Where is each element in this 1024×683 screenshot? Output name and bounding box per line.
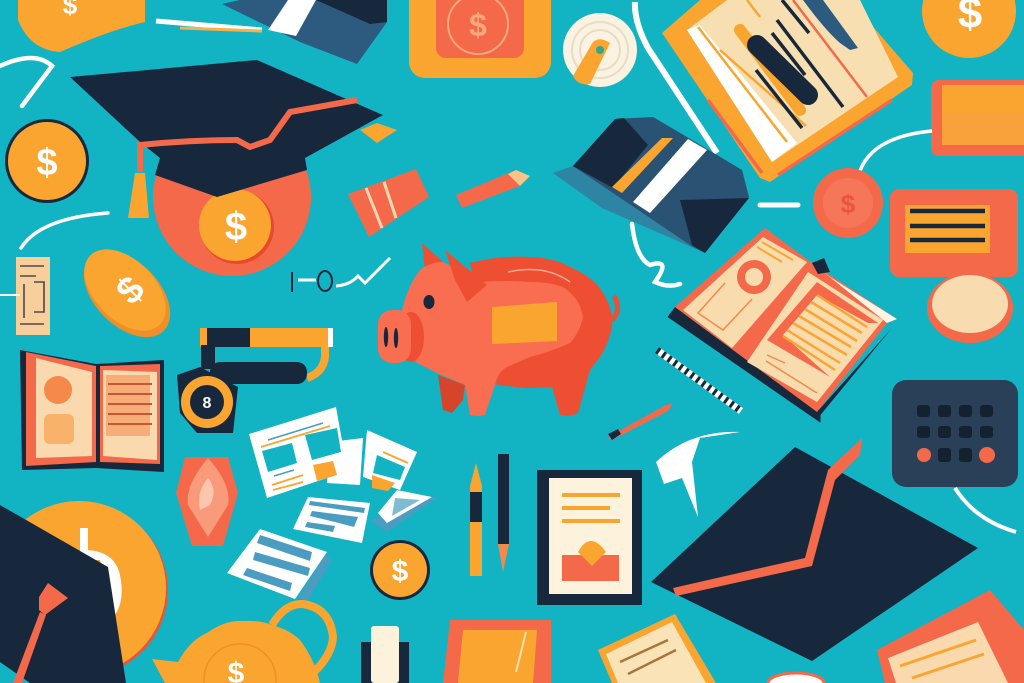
- icon: red pencil: [608, 403, 673, 440]
- decorative white arcs: [0, 58, 798, 286]
- icon: coral coin: $: [841, 189, 856, 219]
- decorative scribble with glyphs: [292, 258, 390, 292]
- icon: bottom bottle: [361, 626, 409, 683]
- icon: coral credit card: [890, 189, 1018, 277]
- icon: large graduation cap with coin: [70, 60, 397, 276]
- icon: large black graduation cap: [651, 438, 978, 661]
- icon: gold coin left: $: [36, 142, 58, 184]
- icon: small crayon: [456, 170, 530, 208]
- icon: striped eraser: [348, 169, 429, 237]
- icon: gold coin left: [5, 119, 89, 203]
- icon: spiral stick: [657, 350, 741, 411]
- icon: open notebook top right: [662, 0, 913, 182]
- icon: round pad: [927, 273, 1013, 343]
- icon: left open book: [20, 350, 164, 472]
- icon: camera device: [177, 328, 333, 433]
- icon: calculator: [892, 380, 1018, 487]
- icon: top right coin: [922, 0, 1016, 58]
- icon: pencil and pen: [470, 454, 509, 576]
- icon: top safe: [409, 0, 551, 78]
- icon: open planner right: [669, 228, 897, 418]
- icon: large graduation cap with coin: $: [225, 205, 247, 249]
- icon: small coin: [370, 540, 430, 600]
- icon: graduation cap bottom left: [0, 505, 126, 683]
- icon: orange piggy pot: [152, 604, 333, 683]
- icon: top wallet: [222, 0, 387, 64]
- icon: paper sheets: [249, 407, 437, 543]
- icon: tilted coin: $: [108, 268, 153, 313]
- decorative white line: [635, 2, 717, 153]
- icon: bottom orange folder: [443, 620, 551, 683]
- decorative white line right: [955, 488, 1016, 532]
- icon: framed tablet: [537, 470, 642, 605]
- icon: tan receipt: [0, 257, 50, 335]
- icon: dark wallet center: [553, 117, 749, 253]
- icon: top safe: $: [469, 7, 487, 43]
- icon: top-left coin badge: [18, 0, 145, 52]
- icon: big coin bottom left: [0, 501, 168, 677]
- icon: tilted coin: [68, 234, 186, 353]
- icon: camera device: 8: [203, 395, 212, 412]
- icon: orange gem: [176, 457, 238, 546]
- decorative pen stroke: [156, 21, 262, 31]
- decorative bottom ellipse: [768, 673, 824, 683]
- icon: piggy bank: [378, 243, 618, 416]
- icon: bottom right wallet: [877, 590, 1024, 683]
- icon: small orange card: [931, 80, 1024, 156]
- decorative white hook: [656, 432, 740, 517]
- icon: coral coin: [813, 168, 883, 238]
- icon: bottom sheet: [227, 529, 332, 600]
- decorative white curve: [858, 131, 932, 177]
- icon: tape roll: [563, 13, 637, 87]
- icon: bottom document: [598, 614, 716, 683]
- icon: small coin: $: [392, 555, 409, 588]
